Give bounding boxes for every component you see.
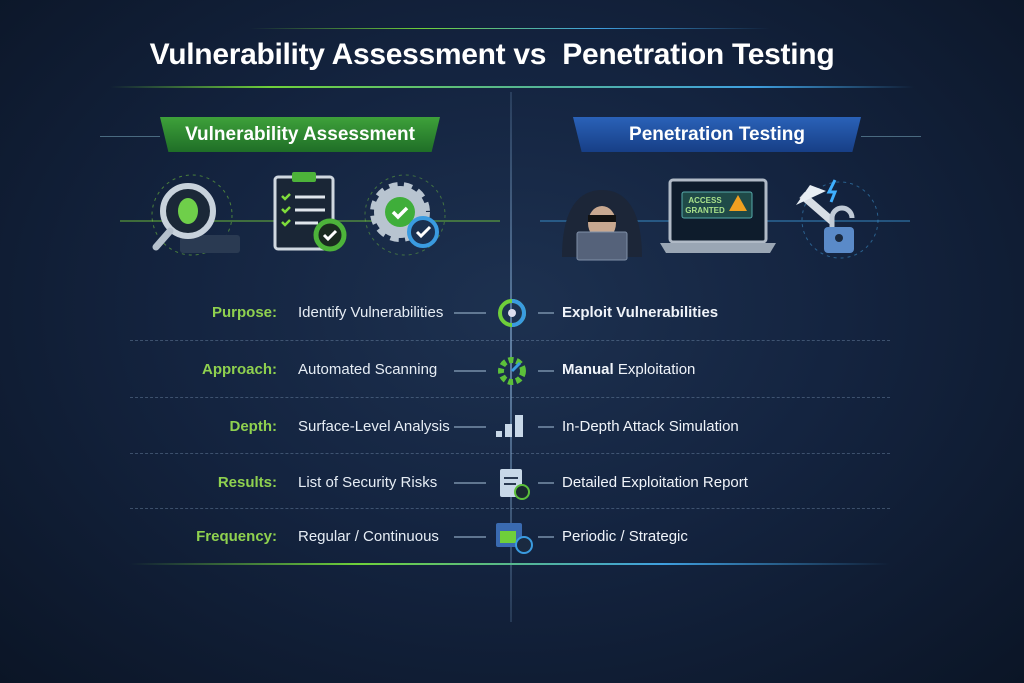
icons: vulnerability assessment xyxy=(120,172,500,256)
icon: laptop access granted xyxy=(660,180,776,253)
row: Approach: Approach: xyxy=(202,361,277,378)
icon: laptop access granted: ACCESS xyxy=(688,196,722,205)
icon: hammer and lock xyxy=(796,180,878,258)
row: Approach: Automated Scanning xyxy=(298,361,437,378)
row: Approach xyxy=(202,361,695,378)
icon: laptop access granted: GRANTED xyxy=(685,206,725,215)
title: Vulnerability Assessment vs Penetration Testing xyxy=(150,38,834,71)
row: Frequency: Periodic / Strategic xyxy=(562,528,688,545)
icon: clipboard checklist xyxy=(275,172,344,249)
row: Results xyxy=(218,474,748,491)
row: Depth: Depth: xyxy=(230,418,277,435)
icon: gear xyxy=(501,360,523,382)
row: Results: Results: xyxy=(218,474,277,491)
row: Frequency: Regular / Continuous xyxy=(298,528,439,545)
row: Depth: Surface-Level Analysis xyxy=(298,418,450,435)
header: Penetration Testing: Penetration Testing xyxy=(629,124,805,145)
row: Depth xyxy=(230,418,739,435)
center row icons xyxy=(454,299,554,554)
header: Vulnerability Assessment xyxy=(160,117,440,152)
icon: gear with checks xyxy=(365,175,445,255)
icon: target ring xyxy=(500,301,524,325)
icon: calendar clock xyxy=(496,523,532,553)
row: Frequency xyxy=(196,528,688,545)
row: Purpose: Purpose: xyxy=(212,304,277,321)
icon: report xyxy=(500,469,529,499)
header: Vulnerability Assessment: Vulnerability Assessment xyxy=(185,124,415,145)
row: Results: List of Security Risks xyxy=(298,474,437,491)
row: Frequency: Frequency: xyxy=(196,528,277,545)
row: Depth: In-Depth Attack Simulation xyxy=(562,418,739,435)
row: Purpose: Exploit Vulnerabilities xyxy=(562,304,718,321)
icon: hooded hacker xyxy=(562,190,642,260)
row: Purpose: Identify Vulnerabilities xyxy=(298,304,443,321)
row dividers xyxy=(130,340,890,341)
row: Results: Detailed Exploitation Report xyxy=(562,474,748,491)
row: Approach: Manual Exploitation xyxy=(562,361,695,378)
icon: magnifier with bug xyxy=(152,175,240,255)
center vertical line xyxy=(510,92,512,622)
icon: bars xyxy=(496,415,523,437)
row: Purpose xyxy=(212,304,718,321)
header: Penetration Testing xyxy=(573,117,861,152)
icons: penetration testing xyxy=(540,178,910,260)
